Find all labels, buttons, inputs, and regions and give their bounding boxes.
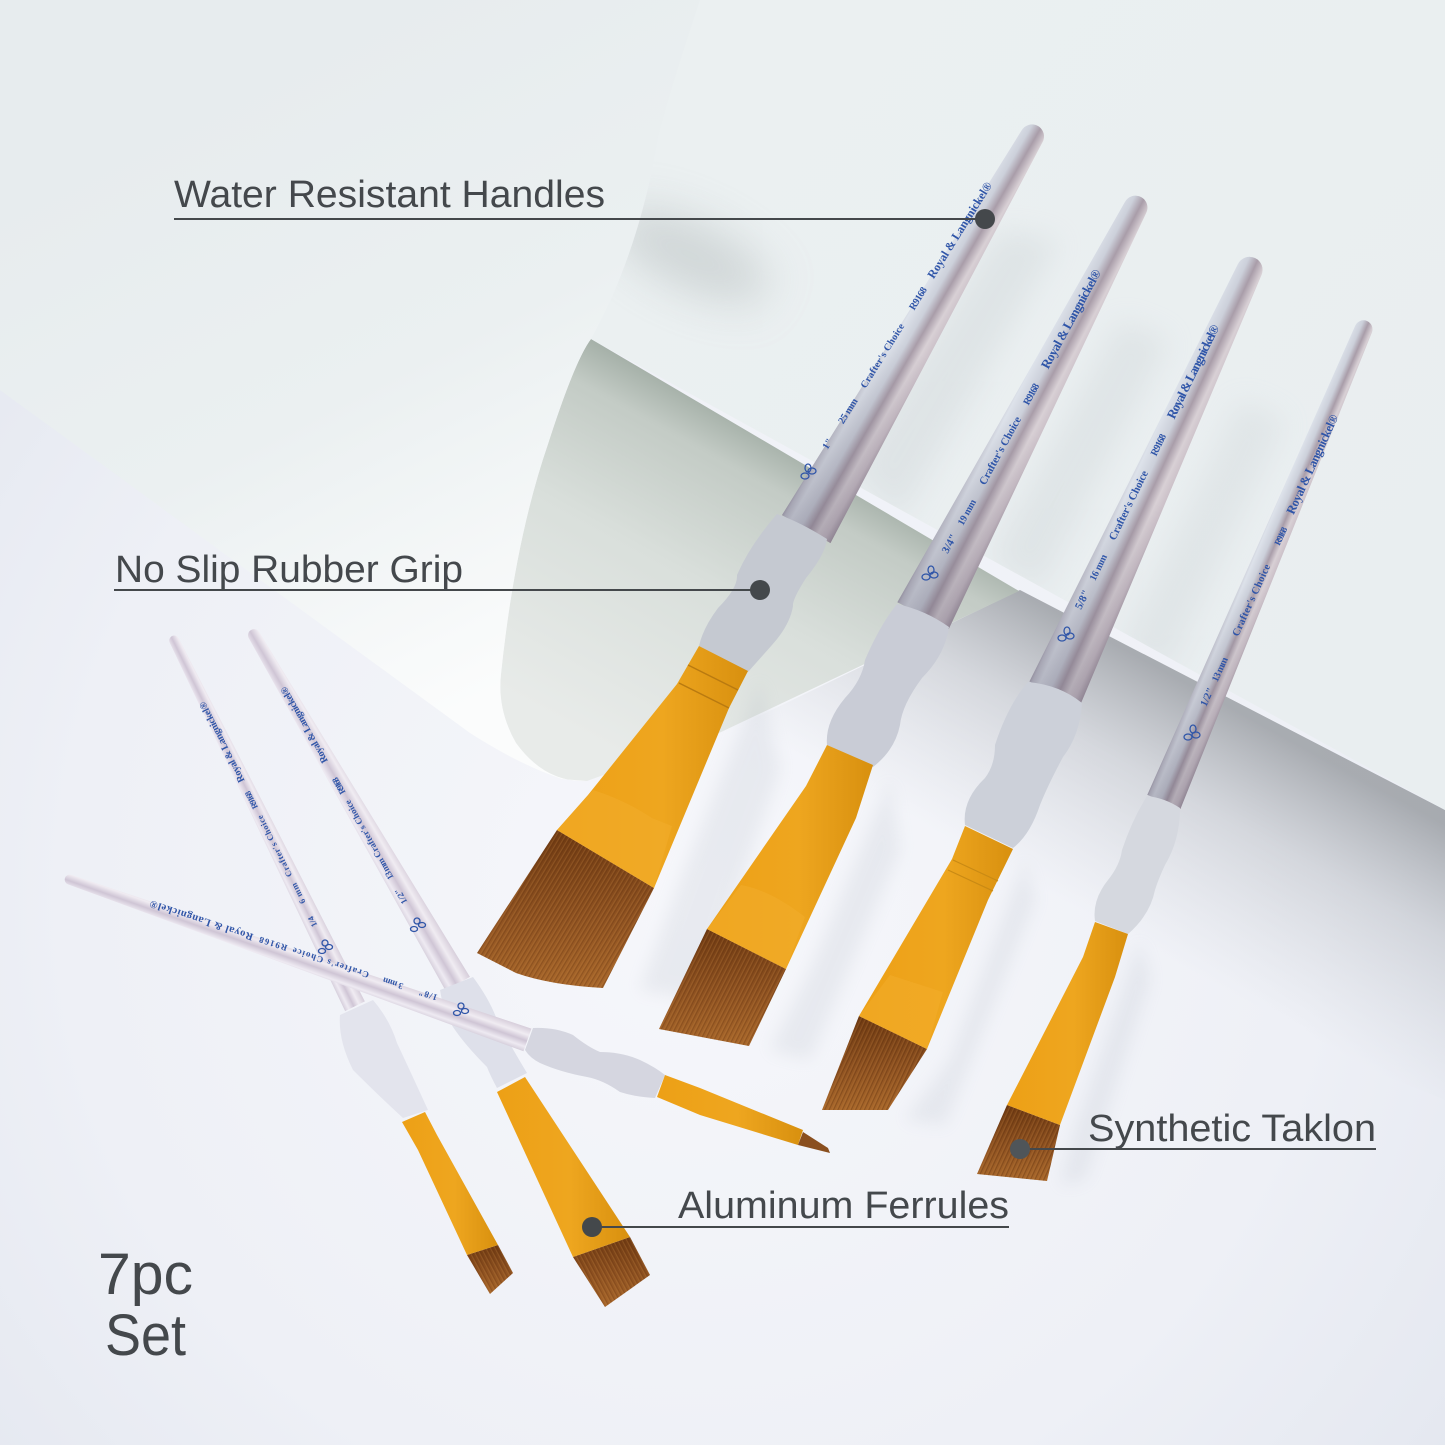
bristles <box>977 1105 1060 1181</box>
handle print: 6 mm <box>289 881 308 906</box>
logo <box>454 1003 468 1016</box>
ferrule <box>657 1075 803 1145</box>
small brush A <box>162 631 513 1294</box>
handle print <box>1070 322 1222 611</box>
brush 2 <box>659 184 1167 1046</box>
shadow under right sheet <box>700 590 1445 1100</box>
brush 1: large angular <box>477 112 1062 988</box>
paper: upper left sheet <box>0 0 710 781</box>
handle print: Royal & Langnickel® <box>1284 412 1341 516</box>
bristles <box>573 1237 650 1307</box>
soft shading on right sheet <box>599 190 1285 670</box>
bristles <box>798 1132 830 1153</box>
rubber grip <box>525 1028 665 1098</box>
handle print: Crafter's Choice <box>977 415 1024 487</box>
handle print: 16 mm <box>1088 552 1110 583</box>
handle print: 13 mm <box>375 856 396 882</box>
set count label: Set <box>105 1303 186 1368</box>
handle print: 1/2" <box>1199 686 1217 708</box>
handle print: 3 mm <box>381 975 404 991</box>
logo <box>1184 725 1200 740</box>
callout: Synthetic Taklon: Synthetic Taklon <box>1088 1108 1376 1150</box>
brush 3 <box>822 246 1280 1110</box>
handle print: 25 mm <box>836 396 861 426</box>
ferrule <box>557 646 748 888</box>
handle print: Royal & Langnickel® <box>149 897 255 942</box>
logo <box>318 940 332 954</box>
logo <box>922 566 938 580</box>
bristles <box>659 929 786 1046</box>
set count label <box>98 1242 193 1368</box>
handle print: 1" <box>821 437 836 452</box>
handle print: 19 mm <box>956 497 979 528</box>
handle <box>1147 314 1384 809</box>
handle print: Crafter's Choice <box>291 946 370 980</box>
logo <box>410 918 426 932</box>
handle print: R9168 <box>907 285 930 312</box>
brush 4 <box>977 314 1384 1181</box>
rubber grip <box>440 977 527 1088</box>
callout: Synthetic Taklon <box>1010 1108 1376 1159</box>
paper: curled underside <box>500 339 1019 781</box>
rubber grip <box>340 1000 428 1118</box>
small brush C <box>61 867 830 1153</box>
paper: right sheet <box>591 0 1445 810</box>
handle print <box>149 897 439 1003</box>
handle print: R9168 <box>242 789 260 811</box>
callout: Water Resistant Handles <box>174 174 995 229</box>
rubber grip <box>1095 796 1180 934</box>
handle print: R9168 <box>1272 525 1289 547</box>
handle print: 13 mm <box>1210 655 1231 684</box>
ferrule <box>707 745 873 969</box>
handle print: Royal & Langnickel® <box>1163 322 1222 421</box>
handle print: Crafter's Choice <box>255 813 294 879</box>
handle print: Royal & Langnickel® <box>1038 266 1104 371</box>
handle print: Crafter's Choice <box>1231 562 1273 638</box>
handle print <box>937 266 1104 556</box>
handle print: Royal & Langnickel® <box>197 699 247 784</box>
callout: Aluminum Ferrules: Aluminum Ferrules <box>678 1185 1009 1227</box>
bristles <box>822 1016 927 1110</box>
handle print: 1/8" <box>417 987 439 1003</box>
handle print: 1/2" <box>393 887 409 906</box>
handle print: Crafter's Choice <box>859 321 907 390</box>
bristles <box>477 830 654 988</box>
handle print: Crafter's Choice <box>1107 469 1151 542</box>
ferrule <box>497 1077 630 1257</box>
handle print: 5/8" <box>1073 588 1093 611</box>
handle print: R9168 <box>330 775 347 796</box>
callout: Water Resistant Handles: Water Resistant Handles <box>174 174 605 216</box>
rubber grip <box>827 604 949 767</box>
handle print: Crafter's Choice <box>343 798 383 860</box>
handle print: Royal & Langnickel® <box>279 684 331 765</box>
logo <box>1058 627 1074 641</box>
handle <box>782 112 1062 543</box>
ferrule <box>859 826 1013 1049</box>
ferrule <box>402 1112 498 1255</box>
ferrule <box>1007 922 1128 1125</box>
handle <box>239 623 470 991</box>
handle <box>1029 246 1280 705</box>
callout: No Slip Rubber Grip: No Slip Rubber Grip <box>115 549 463 591</box>
ferrule cast shadows <box>640 680 1150 1185</box>
rubber grip <box>699 514 827 672</box>
callout: Aluminum Ferrules <box>582 1185 1009 1237</box>
handle <box>897 184 1167 629</box>
handle print: R9168 <box>1022 382 1042 407</box>
callout: No Slip Rubber Grip <box>114 549 770 600</box>
handle print <box>818 179 995 452</box>
handle <box>162 631 365 1011</box>
handle print <box>1196 412 1341 708</box>
handle print <box>279 684 410 906</box>
handle print: Royal & Langnickel® <box>924 179 995 281</box>
small brush B <box>239 623 650 1307</box>
rubber grip <box>965 682 1082 848</box>
handle print: 3/4" <box>940 532 960 556</box>
logo <box>801 464 816 479</box>
handle print: 1/4 <box>305 914 319 929</box>
bristles <box>467 1245 513 1294</box>
handle print <box>197 699 320 929</box>
handle print: R9168 <box>1149 432 1169 458</box>
set count label: 7pc <box>98 1242 193 1307</box>
handle <box>61 867 531 1051</box>
handle print: R9168 <box>257 934 289 953</box>
